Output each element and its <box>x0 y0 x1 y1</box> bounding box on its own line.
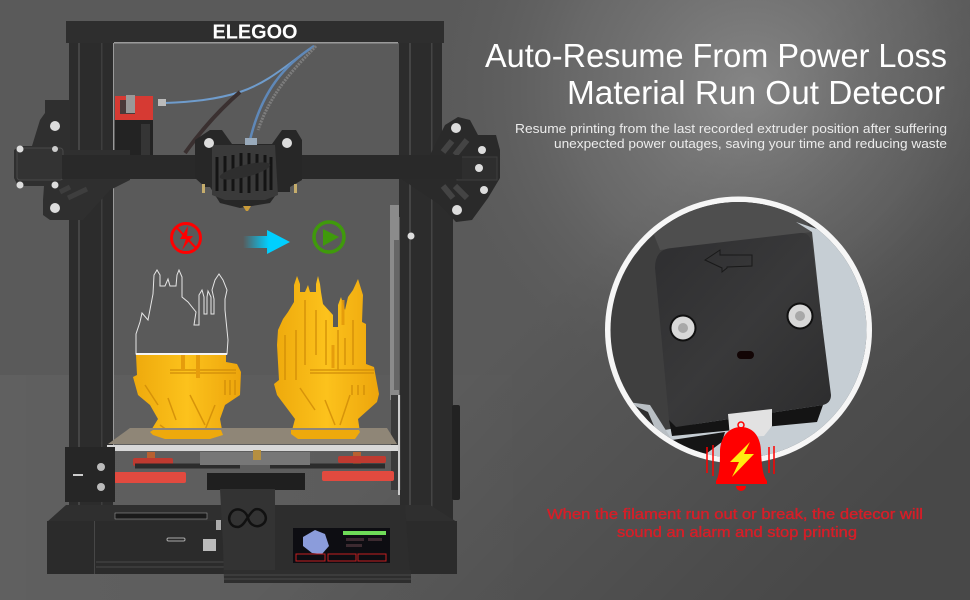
play icon <box>314 222 344 252</box>
warning text: When the filament run out or break, the detecor will <box>547 507 923 523</box>
printer base <box>47 505 457 574</box>
runout sensor and motor <box>115 95 166 155</box>
warning text: sound an alarm and stop printing <box>617 525 857 541</box>
heading: Auto-Resume From Power Loss <box>485 38 947 75</box>
touchscreen <box>293 528 390 563</box>
subtitle: Resume printing from the last recorded extruder position after suffering <box>515 122 947 136</box>
subtitle <box>515 122 947 151</box>
left Z motor block <box>65 447 115 502</box>
circular sensor photo <box>600 195 880 475</box>
touchscreen housing <box>224 505 411 583</box>
Z lead screw rail <box>390 205 401 495</box>
top beam with logo <box>66 21 444 44</box>
print head <box>195 130 302 211</box>
right X bracket <box>400 117 500 240</box>
top beam with logo: ELEGOO <box>212 22 298 44</box>
left X bracket <box>14 100 130 220</box>
bed supports and knobs <box>114 450 394 490</box>
outline of unfinished castle <box>136 270 228 354</box>
subtitle: unexpected power outages, saving your time and reducing waste <box>554 137 947 151</box>
partial print: yellow base <box>133 353 241 439</box>
power off icon <box>172 224 200 252</box>
X axis beam <box>62 155 462 179</box>
resume arrow <box>243 230 290 254</box>
filament tubes <box>165 46 316 153</box>
completed castle <box>274 276 379 439</box>
3D printer <box>14 21 500 583</box>
build plate <box>107 428 398 451</box>
heading <box>485 38 947 112</box>
warning text <box>547 507 923 541</box>
front tower with infinity logo <box>216 489 283 580</box>
heading: Material Run Out Detecor <box>567 75 945 112</box>
left upright <box>69 42 114 542</box>
right upright <box>399 42 460 545</box>
alarm bell icon <box>707 422 774 491</box>
